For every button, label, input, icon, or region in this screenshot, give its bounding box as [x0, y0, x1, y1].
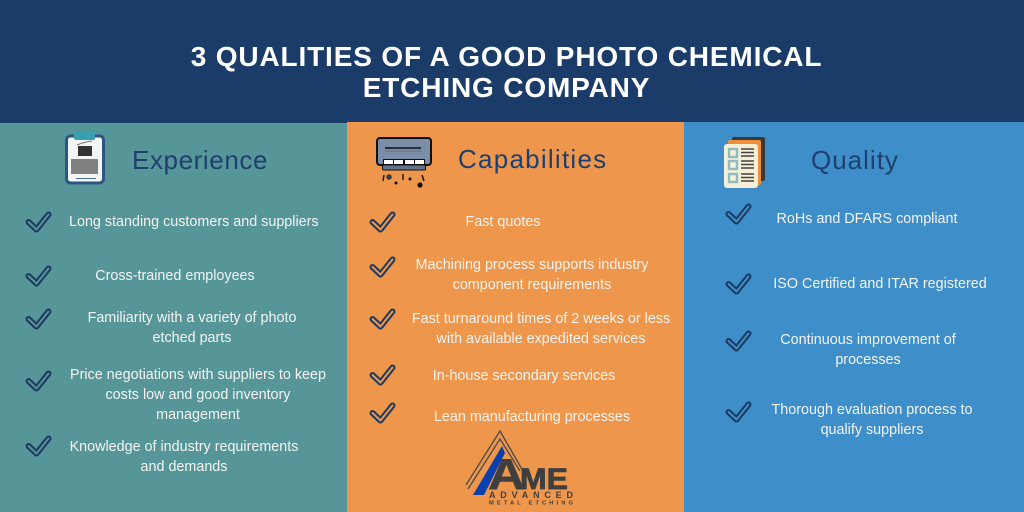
item: machining	[416, 257, 648, 293]
check icon	[370, 364, 396, 386]
check icon	[26, 212, 52, 232]
item: thorough evaluation	[772, 402, 972, 438]
panel: experience	[0, 123, 347, 512]
check icon	[726, 402, 752, 422]
item: continuous improvement	[780, 332, 956, 368]
panel: quality	[684, 122, 1024, 512]
heading: Quality: Quality	[811, 145, 899, 175]
check icon	[26, 370, 52, 392]
item: customers and suppliers: Long standing customers and suppliers	[69, 214, 319, 230]
check icon	[26, 308, 52, 330]
item: knowledge	[70, 439, 298, 475]
item: lean: Lean manufacturing processes	[434, 409, 630, 425]
item: turnaround: Fast turnaround times of 2 weeks or less	[412, 311, 670, 327]
check icon	[726, 330, 752, 352]
item: familiarity: Familiarity with a variety of photo	[88, 310, 296, 326]
item: familiarity: etched parts	[153, 330, 231, 346]
heading: Capabilities: Capabilities	[458, 144, 607, 174]
logo: AME: METAL ETCHING	[489, 500, 573, 506]
item: thorough evaluation: Thorough evaluation process to	[772, 402, 972, 418]
item: price negotiations: Price negotiations with suppliers to keep	[70, 367, 326, 383]
item: knowledge: Knowledge of industry requirements	[70, 439, 298, 455]
item: thorough evaluation: qualify suppliers	[821, 422, 923, 438]
item: fast quotes: Fast quotes	[466, 214, 540, 230]
check icon	[726, 274, 752, 294]
item: continuous improvement: Continuous improvement of	[780, 332, 956, 348]
item: turnaround	[412, 311, 670, 347]
title: 3 QUALITIES OF A GOOD PHOTO CHEMICAL	[191, 41, 822, 72]
item: RoHs: RoHs and DFARS compliant	[777, 211, 957, 227]
check icon	[726, 204, 752, 224]
check icon	[26, 436, 52, 456]
logo: AME	[466, 430, 574, 506]
logo: AME: ME	[520, 463, 568, 496]
item: price negotiations	[70, 367, 326, 423]
check icon	[370, 402, 396, 424]
check icon	[370, 256, 396, 278]
check icon	[370, 308, 396, 330]
item: secondary: In-house secondary services	[433, 368, 615, 384]
item: cross-trained: Cross-trained employees	[95, 268, 255, 284]
icon: checklist	[724, 137, 765, 188]
logo: AME: A	[488, 450, 525, 499]
icon: air unit	[376, 137, 432, 188]
icon: clipboard chart	[65, 132, 105, 184]
title	[191, 41, 822, 103]
item: knowledge: and demands	[141, 459, 227, 475]
item: turnaround: with available expedited services	[437, 331, 645, 347]
heading: Experience: Experience	[132, 145, 268, 175]
item: machining: component requirements	[453, 277, 611, 293]
check icon	[26, 266, 52, 286]
item: machining: Machining process supports industry	[416, 257, 648, 273]
item: continuous improvement: processes	[835, 352, 901, 368]
item: price negotiations: costs low and good inventory	[106, 387, 290, 403]
logo: AME: ADVANCED	[489, 490, 574, 500]
panel: capabilities	[347, 122, 684, 512]
title: ETCHING COMPANY	[363, 72, 650, 103]
check icon	[370, 212, 396, 232]
item: price negotiations: management	[156, 407, 240, 423]
item: ISO: ISO Certified and ITAR registered	[773, 276, 987, 292]
item: familiarity	[88, 310, 296, 346]
